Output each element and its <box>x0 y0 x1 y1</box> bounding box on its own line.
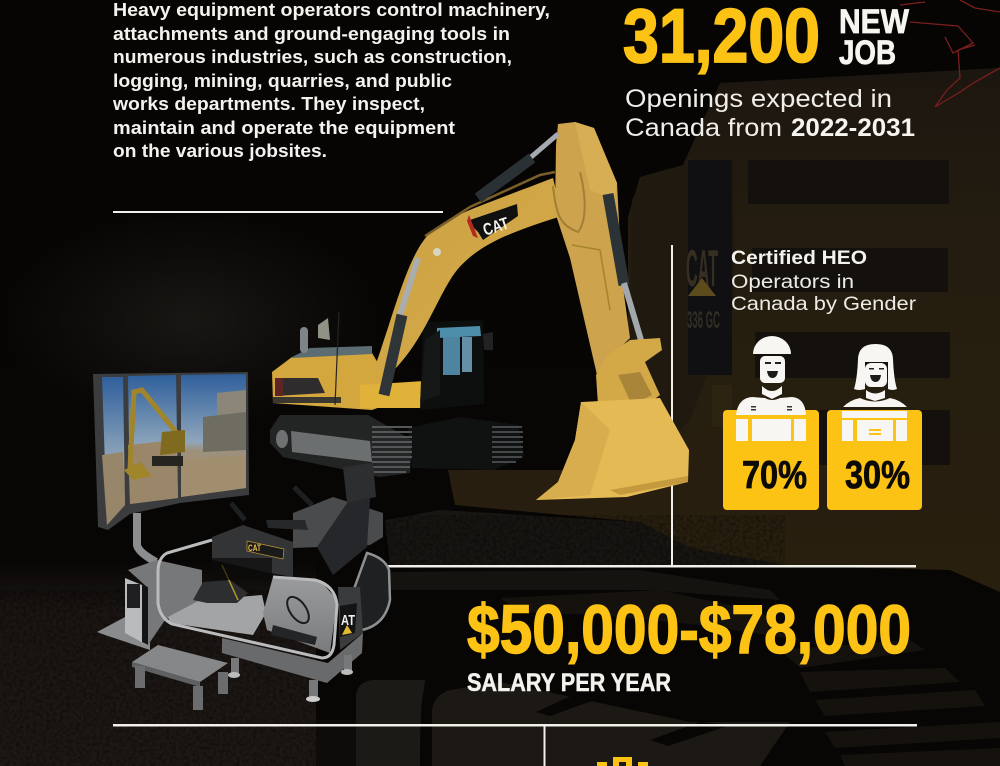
card: female 30% <box>827 344 922 510</box>
heading: Canada by Gender <box>731 294 917 315</box>
background: dark excavator photo: CAT <box>686 240 718 298</box>
excavator illustration: CAT <box>481 213 512 240</box>
bucket cylinder <box>608 194 641 340</box>
stat: salary: $50,000-$78,000 <box>467 591 911 668</box>
chrome rail <box>158 540 337 658</box>
pedals <box>193 580 248 603</box>
stat: new jobs: Openings expected in <box>625 85 892 113</box>
icon: yellow gear (cropped) <box>597 757 648 766</box>
decoration: ground <box>0 560 316 766</box>
background: dark excavator photo: 336 GC <box>687 307 720 334</box>
bucket <box>536 398 689 500</box>
excavator illustration <box>270 122 689 500</box>
divider lines <box>113 211 917 766</box>
panel: certified HEO by gender <box>723 248 922 510</box>
monitor frame <box>93 372 249 530</box>
step stool <box>132 645 228 710</box>
stat: new jobs: 2022-2031 <box>791 114 915 142</box>
heading: Certified HEO <box>731 248 867 269</box>
stat: new jobs <box>623 0 915 142</box>
joysticks <box>231 487 312 520</box>
far track <box>408 417 524 470</box>
CAT simulator badge <box>247 541 284 559</box>
decoration: red map outline <box>900 0 1000 107</box>
stat: salary <box>467 591 911 697</box>
deck <box>168 595 266 635</box>
card: female 30%: 30% <box>845 454 910 497</box>
boom cylinder <box>384 258 418 395</box>
right rail <box>350 553 390 630</box>
armrest <box>266 520 308 530</box>
side column <box>338 587 363 650</box>
stat: new jobs: Canada from <box>625 114 782 142</box>
intro text block <box>112 0 550 161</box>
arm top cylinder <box>478 134 558 198</box>
CAT side panel <box>340 603 357 637</box>
lower base <box>222 633 363 683</box>
decoration: textured ground under body <box>385 510 790 566</box>
intro text block: numerous industries, such as construction, <box>113 47 512 67</box>
CAT simulator badge: CAT <box>248 543 261 553</box>
house body <box>272 353 400 410</box>
stick <box>555 122 630 375</box>
linkage <box>596 338 662 410</box>
stat: salary: SALARY PER YEAR <box>467 669 671 697</box>
intro text block: attachments and ground-engaging tools in <box>113 24 510 44</box>
grey control panel <box>263 577 337 653</box>
decoration: machine body <box>448 68 1000 592</box>
tray <box>97 617 150 650</box>
stat: new jobs: JOB <box>839 34 896 72</box>
decoration: track arc <box>390 570 780 600</box>
heading <box>731 248 917 315</box>
simulator illustration <box>93 372 390 710</box>
CAT side panel: AT <box>341 612 355 629</box>
cab <box>420 320 484 410</box>
legs <box>228 655 353 702</box>
PC tower <box>125 578 147 645</box>
near track <box>270 415 412 477</box>
card: male 70% <box>723 336 819 510</box>
simulated excavator <box>130 390 176 468</box>
console <box>212 525 293 577</box>
intro text block: on the various jobsites. <box>113 141 327 161</box>
stat: new jobs: NEW <box>839 3 910 41</box>
card: male 70%: 70% <box>742 454 807 497</box>
seat <box>317 463 376 575</box>
monitor pole <box>137 513 156 562</box>
intro text block: Heavy equipment operators control machinery, <box>113 0 550 20</box>
boom <box>373 178 562 372</box>
intro text block: maintain and operate the equipment <box>113 118 455 138</box>
heading: Operators in <box>731 272 854 293</box>
intro text block: logging, mining, quarries, and public <box>113 71 452 91</box>
grey box <box>128 560 202 645</box>
rear box <box>293 497 383 548</box>
screens <box>102 377 125 525</box>
decoration: lower panels <box>356 680 425 766</box>
intro text block: works departments. They inspect, <box>112 94 425 114</box>
boom lines <box>425 172 555 236</box>
